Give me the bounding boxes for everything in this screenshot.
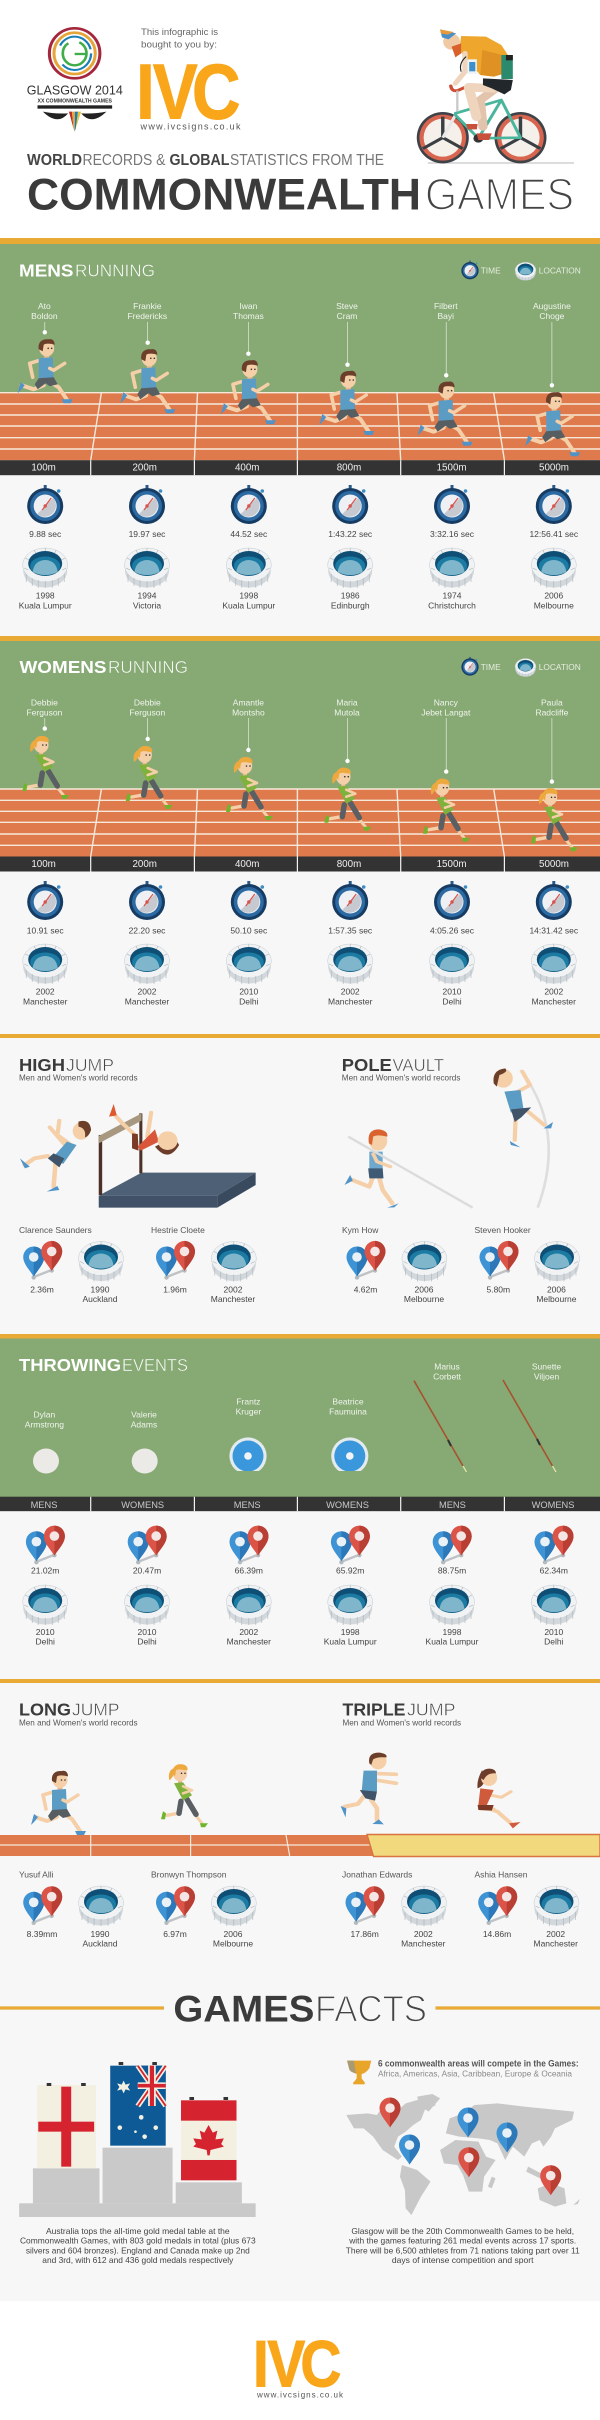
logo: IVC: IVC	[136, 49, 240, 135]
heights and venues: 1990	[91, 1284, 110, 1294]
years and venues: Delhi	[239, 997, 259, 1007]
heights and venues: Melbourne	[536, 1294, 577, 1304]
athlete names: Armstrong	[25, 1419, 64, 1429]
record times: 10.91 sec	[27, 925, 64, 935]
athlete names	[19, 1225, 531, 1235]
sponsor intro text	[141, 27, 218, 50]
athlete names and markers: Maria	[336, 697, 358, 707]
footer logo: IVC: www.ivcsigns.co.uk	[256, 2390, 344, 2400]
athlete names and markers: Ato	[38, 301, 51, 311]
athlete names: Kym How	[342, 1225, 379, 1235]
athlete names and markers: Frankie	[133, 301, 162, 311]
heading: pole vault: VAULT	[392, 1055, 444, 1075]
years and venues: Manchester	[227, 1637, 271, 1647]
athlete names and markers: Choge	[539, 311, 565, 321]
heights and venues: 1.96m	[163, 1284, 187, 1294]
years and venues: 2002	[239, 1627, 259, 1637]
athlete names: Clarence Saunders	[19, 1225, 92, 1235]
long jump athletes	[31, 1764, 208, 1835]
legend: time and location: TIME	[481, 662, 501, 672]
heights and venues: 5.80m	[486, 1284, 510, 1294]
text: games statistics: There will be 6,500 athletes from 71 nations taking part over 11	[346, 2245, 580, 2255]
text: games statistics: with the games featuring 261 medal events across 17 sports.	[348, 2236, 576, 2246]
years and venues: 2010	[443, 987, 462, 997]
years and venues: Manchester	[125, 997, 169, 1007]
distances and venues: Melbourne	[213, 1939, 253, 1949]
heading: high jump: JUMP	[66, 1055, 114, 1075]
heading: pole vault: POLE	[342, 1055, 392, 1075]
stadium icons	[78, 1886, 579, 1926]
heading: games facts: FACTS	[315, 1989, 427, 2030]
distances: 20.47m	[133, 1566, 161, 1576]
athlete names: Dylan	[34, 1409, 56, 1419]
running track	[0, 393, 600, 475]
location pin icons	[23, 1886, 517, 1925]
record times: 50.10 sec	[230, 925, 268, 935]
location pin icons	[26, 1526, 573, 1564]
athlete names: Kruger	[236, 1406, 261, 1416]
athlete names	[25, 1361, 561, 1429]
heading: triple jump: JUMP	[407, 1700, 456, 1720]
distances and venues: Manchester	[401, 1939, 446, 1949]
text: commonwealth areas: 6 commonwealth areas will compete in the Games:	[378, 2058, 579, 2068]
athlete names and markers: Radcliffe	[535, 707, 569, 717]
text: games statistics	[346, 2226, 580, 2265]
athlete names and markers	[31, 301, 571, 387]
years and venues: 1998	[341, 1627, 360, 1637]
text: gold medal table: Commonwealth Games, with 803 gold medals in total (plus 673	[20, 2236, 256, 2246]
title: WORLD	[27, 152, 82, 169]
years and venues: Kuala Lumpur	[324, 1637, 377, 1647]
years and venues: Delhi	[544, 1637, 564, 1647]
legend: time and location: LOCATION	[539, 662, 581, 672]
distances and venues: 1990	[91, 1929, 110, 1939]
text: gold medal table: silvers and 604 bronzes). England and Canada make up 2nd	[26, 2245, 250, 2255]
distances and venues: 2002	[546, 1929, 565, 1939]
distances and venues: 17.86m	[351, 1929, 379, 1939]
sponsor intro text: bought to you by:	[141, 40, 217, 50]
years and venues: 1998	[239, 590, 259, 600]
athlete names and markers: Boldon	[31, 311, 58, 321]
category labels: MENS	[439, 1500, 466, 1510]
years and venues: 1974	[443, 590, 462, 600]
stopwatch icons	[27, 881, 572, 920]
logo: Glasgow 2014: GLASGOW 2014	[27, 84, 123, 98]
years and venues: Manchester	[23, 997, 68, 1007]
athlete names and markers: Steve	[336, 301, 358, 311]
heading: long jump: Men and Women's world records	[19, 1717, 138, 1727]
years and venues: 1994	[138, 590, 157, 600]
athlete names: Frantz	[236, 1397, 260, 1407]
athlete names: Bronwyn Thompson	[151, 1870, 227, 1880]
heading: long jump	[19, 1700, 138, 1727]
panel: throwing events	[0, 1334, 600, 1683]
record times: 44.52 sec	[230, 529, 268, 539]
heading: womens running	[20, 657, 188, 677]
record times: 9.88 sec	[29, 529, 62, 539]
panel: womens running	[0, 641, 600, 1038]
distances and venues	[27, 1929, 578, 1949]
illustration: cyclist	[417, 29, 574, 164]
illustration: high jump	[20, 1104, 256, 1208]
distance labels: 400m	[235, 859, 259, 870]
athlete names: Ashia Hansen	[474, 1870, 528, 1880]
athlete names: Hestrie Cloete	[151, 1225, 205, 1235]
heading: long jump: LONG	[19, 1700, 71, 1720]
heading: high jump: HIGH	[19, 1055, 65, 1075]
stadium icons	[23, 1585, 576, 1625]
footer logo: IVC: IVC	[253, 2328, 341, 2402]
heights and venues: Melbourne	[404, 1294, 444, 1304]
panel: long jump and triple jump	[0, 1683, 600, 2301]
illustration: pole vault	[344, 1068, 553, 1208]
heading: mens running: RUNNING	[75, 261, 155, 281]
distance labels: 400m	[235, 463, 259, 474]
heading: throwing events: EVENTS	[122, 1355, 188, 1375]
athlete names and markers: Paula	[541, 697, 563, 707]
distances and venues: 6.97m	[163, 1929, 187, 1939]
athlete names and markers: Ferguson	[26, 707, 63, 717]
years and venues: 1998	[443, 1627, 462, 1637]
years and venues: 2010	[36, 1627, 55, 1637]
flag: Canada	[181, 2097, 237, 2180]
heading: long jump: JUMP	[72, 1700, 120, 1720]
athlete names and markers: Ferguson	[129, 707, 166, 717]
years and venues: 2010	[138, 1627, 157, 1637]
location pin icons	[23, 1241, 518, 1280]
record times: 22.20 sec	[129, 925, 166, 935]
text: games statistics: Glasgow will be the 20th Commonwealth Games to be held,	[351, 2226, 574, 2236]
athlete names: Faumuina	[329, 1406, 367, 1416]
years and venues: 1986	[341, 590, 360, 600]
athlete names and markers: Iwan	[239, 301, 258, 311]
distances and venues: Auckland	[83, 1939, 118, 1949]
flag: Australia	[110, 2062, 166, 2146]
years and venues: Victoria	[133, 600, 161, 610]
distance labels: 100m	[31, 463, 56, 474]
athlete names and markers: Jebet Langat	[421, 707, 471, 717]
category labels: WOMENS	[121, 1500, 164, 1510]
years and venues: Delhi	[137, 1637, 157, 1647]
athlete names and markers: Filbert	[434, 301, 458, 311]
icon: shot put balls	[33, 1448, 158, 1474]
heading: mens running: MENS	[19, 261, 74, 281]
athlete names and markers: Thomas	[233, 311, 264, 321]
years and venues: Delhi	[36, 1637, 55, 1647]
distance labels: 1500m	[437, 859, 467, 870]
legend: time and location	[461, 261, 581, 281]
distances	[31, 1566, 568, 1576]
years and venues	[23, 987, 576, 1007]
heading: pole vault: Men and Women's world records	[342, 1073, 460, 1083]
category labels: WOMENS	[326, 1500, 369, 1510]
athlete names and markers	[26, 697, 569, 784]
legend: time and location: LOCATION	[539, 266, 581, 276]
triple jump athletes	[341, 1753, 520, 1828]
years and venues: Kuala Lumpur	[19, 600, 72, 610]
heading: high jump	[19, 1055, 138, 1083]
years and venues: Manchester	[328, 997, 373, 1007]
distances and venues: 14.86m	[483, 1929, 511, 1939]
athlete names	[19, 1870, 528, 1880]
heading: throwing events: THROWING	[19, 1355, 121, 1375]
years and venues: Kuala Lumpur	[222, 600, 275, 610]
years and venues: 2002	[341, 987, 360, 997]
heights and venues: Auckland	[83, 1294, 118, 1304]
heading: games facts	[0, 1989, 600, 2030]
heading: womens running: WOMENS	[20, 657, 107, 677]
distance labels: 200m	[132, 463, 157, 474]
distances and venues: 2006	[224, 1929, 243, 1939]
years and venues: Manchester	[532, 997, 576, 1007]
logo: Glasgow 2014: XX COMMONWEALTH GAMES	[38, 98, 113, 104]
years and venues	[36, 1627, 564, 1647]
text: gold medal table: and 3rd, with 612 and 436 gold medals respectively	[42, 2255, 234, 2265]
distance labels: 5000m	[539, 859, 569, 870]
runway and sand pit	[0, 1834, 600, 1856]
record times: 12:56.41 sec	[529, 529, 579, 539]
years and venues: 2006	[544, 590, 564, 600]
record times: 3:32.16 sec	[430, 529, 475, 539]
category labels	[31, 1500, 574, 1510]
legend: time and location	[461, 657, 581, 677]
legend: time and location: TIME	[481, 266, 501, 276]
stadium icons	[23, 944, 576, 984]
years and venues: 2002	[138, 987, 157, 997]
podium with flags	[19, 2062, 256, 2217]
distances and venues: 2002	[414, 1929, 433, 1939]
distances: 66.39m	[235, 1566, 263, 1576]
record times: 14:31.42 sec	[529, 925, 579, 935]
text: games statistics: days of intense competition and sport	[392, 2255, 534, 2265]
athlete names and markers: Debbie	[134, 697, 161, 707]
athlete names and markers: Amantle	[233, 697, 264, 707]
icon: discus	[228, 1437, 370, 1475]
athlete names: Valerie	[131, 1409, 157, 1419]
record times: 4:05.26 sec	[430, 925, 475, 935]
title: GLOBAL	[170, 152, 230, 169]
years and venues: Melbourne	[534, 600, 574, 610]
years and venues	[19, 590, 574, 610]
athlete names: Viljoen	[534, 1371, 559, 1381]
category labels: MENS	[31, 1500, 57, 1510]
panel: mens running	[0, 238, 600, 642]
heading: triple jump: Men and Women's world records	[342, 1717, 461, 1727]
distances: 62.34m	[540, 1566, 568, 1576]
athlete names and markers: Mutola	[334, 707, 360, 717]
heading: throwing events	[19, 1355, 188, 1375]
heights and venues: 2002	[224, 1284, 243, 1294]
distance labels: 800m	[337, 859, 361, 870]
running track	[0, 789, 600, 872]
years and venues: 1998	[36, 590, 55, 600]
logo: IVC: www.ivcsigns.co.uk	[140, 122, 241, 132]
distance labels	[31, 463, 569, 474]
heights and venues: 2.36m	[30, 1284, 54, 1294]
distances: 21.02m	[31, 1566, 59, 1576]
distance labels: 1500m	[437, 463, 467, 474]
icon: javelins	[414, 1380, 556, 1472]
world map with pins	[346, 2094, 580, 2215]
record times: 1:57.35 sec	[328, 925, 373, 935]
title: STATISTICS FROM THE	[230, 152, 384, 169]
athlete names: Jonathan Edwards	[342, 1870, 412, 1880]
athlete names and markers: Bayi	[438, 311, 454, 321]
years and venues: 2002	[544, 987, 564, 997]
record times: 19.97 sec	[129, 529, 166, 539]
years and venues: Edinburgh	[331, 600, 370, 610]
stadium icons	[23, 548, 576, 588]
panel: high jump and pole vault	[0, 1038, 600, 1334]
athlete names and markers: Nancy	[434, 697, 459, 707]
record times	[27, 925, 579, 935]
stopwatch icons	[27, 485, 572, 524]
distances: 65.92m	[336, 1566, 364, 1576]
heights and venues: 2006	[547, 1284, 566, 1294]
icon: trophy	[347, 2061, 371, 2084]
runners	[22, 736, 578, 851]
distance labels: 200m	[132, 859, 157, 870]
heights and venues	[30, 1284, 577, 1304]
years and venues: 2010	[239, 987, 259, 997]
athlete names and markers: Fredericks	[127, 311, 167, 321]
athlete names: Marius	[434, 1361, 460, 1371]
distance labels	[31, 859, 569, 870]
years and venues: Kuala Lumpur	[426, 1637, 479, 1647]
distances and venues: Manchester	[533, 1939, 578, 1949]
heading: high jump: Men and Women's world records	[19, 1073, 138, 1083]
athlete names: Yusuf Alli	[19, 1870, 54, 1880]
athlete names and markers: Montsho	[232, 707, 265, 717]
athlete names and markers: Augustine	[533, 301, 571, 311]
record times: 1:43.22 sec	[328, 529, 373, 539]
years and venues: Christchurch	[428, 600, 476, 610]
category labels: MENS	[234, 1500, 261, 1510]
heading: womens running: RUNNING	[108, 657, 188, 677]
athlete names: Steven Hooker	[474, 1225, 531, 1235]
title	[27, 152, 574, 219]
athlete names: Adams	[131, 1419, 157, 1429]
distance labels: 800m	[337, 463, 361, 474]
stadium icons	[78, 1242, 580, 1282]
flag: England	[37, 2083, 96, 2168]
text: commonwealth areas	[378, 2058, 579, 2078]
years and venues: 2002	[36, 987, 55, 997]
sponsor intro text: This infographic is	[141, 27, 218, 38]
category labels: WOMENS	[532, 1500, 574, 1510]
distances and venues: 8.39mm	[27, 1929, 57, 1939]
athlete names and markers: Cram	[337, 311, 357, 321]
heading: mens running	[19, 261, 155, 281]
years and venues: Delhi	[442, 997, 462, 1007]
heading: pole vault	[342, 1055, 460, 1083]
heading: games facts: GAMES	[173, 1989, 314, 2030]
years and venues: 2010	[544, 1627, 564, 1637]
title: RECORDS &	[82, 152, 166, 169]
text: gold medal table	[20, 2226, 256, 2265]
athlete names: Corbett	[433, 1371, 462, 1381]
distances: 88.75m	[438, 1566, 466, 1576]
athlete names and markers: Debbie	[31, 697, 58, 707]
title: GAMES	[425, 170, 574, 219]
distance labels: 5000m	[539, 463, 569, 474]
heights and venues: 4.62m	[354, 1284, 377, 1294]
runners	[18, 339, 580, 456]
athlete names: Beatrice	[332, 1397, 364, 1407]
athlete names: Sunette	[532, 1361, 561, 1371]
heading: triple jump: TRIPLE	[342, 1700, 406, 1720]
title: COMMONWEALTH	[27, 170, 421, 219]
logo: Glasgow 2014	[27, 28, 123, 132]
heights and venues: 2006	[415, 1284, 434, 1294]
text: gold medal table: Australia tops the all-time gold medal table at the	[46, 2226, 230, 2236]
distance labels: 100m	[31, 859, 56, 870]
record times	[29, 529, 579, 539]
heights and venues: Manchester	[211, 1294, 255, 1304]
heading: triple jump	[342, 1700, 461, 1727]
text: commonwealth areas: Africa, Americas, Asia, Caribbean, Europe & Oceania	[378, 2068, 572, 2078]
